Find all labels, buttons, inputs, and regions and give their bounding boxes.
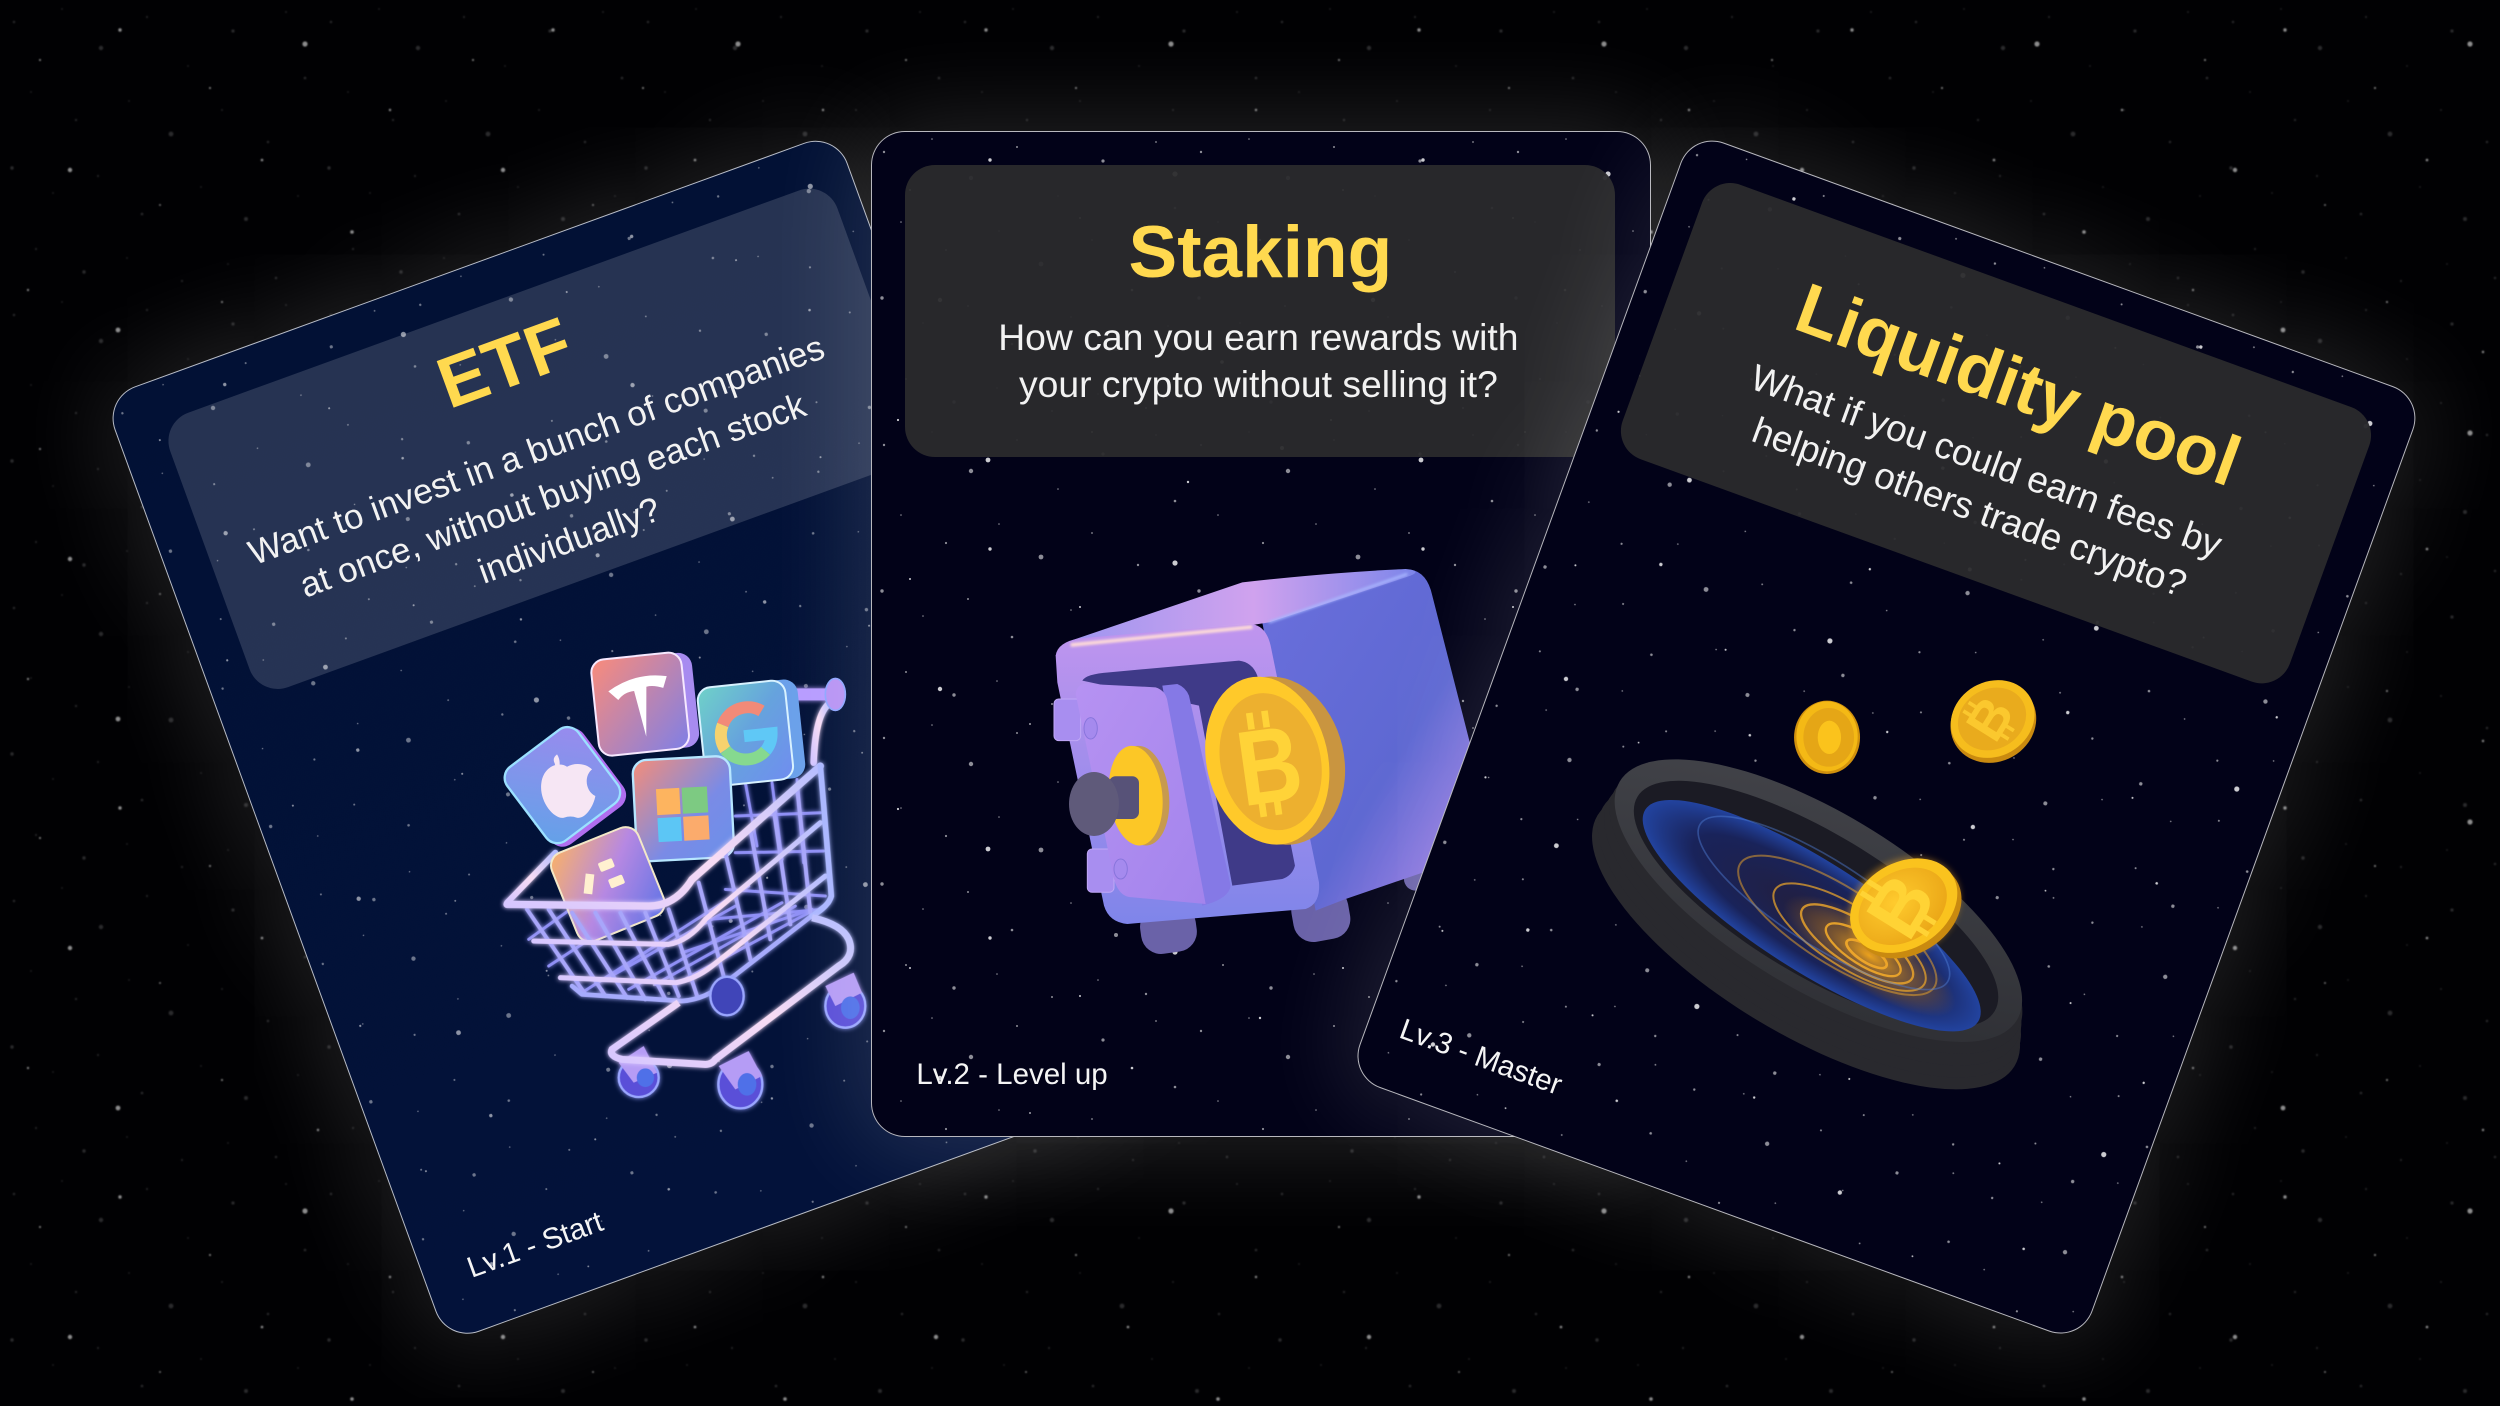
swirl [1672,788,1988,1038]
safe top face [1056,569,1416,656]
illustration: safe with bitcoin [1054,569,1470,954]
card: Liquidity pool [1348,131,2425,1343]
question: Staking: your crypto without selling it? [1019,363,1498,405]
edge highlight between top and side [1269,574,1408,623]
title: ETF: ETF [427,303,583,425]
header panel: Liquidity pool [1613,175,2380,692]
illustration: liquidity pool dish with coins [1592,680,2036,1090]
title: Liquidity pool: Liquidity pool [1786,269,2250,502]
coin: upper right [1936,665,2051,779]
card shadow: Liquidity pool [1348,131,2425,1343]
bitcoin coin: B [1230,702,1310,830]
coin: main falling coin [1831,838,1980,978]
icon: Google tile [697,678,807,788]
dish body [1550,713,2063,1146]
card: Staking [871,131,1651,1137]
card shadow: Staking [871,131,1651,1137]
question: Staking [998,316,1519,405]
coin: middle [1794,701,1860,774]
coin: main falling coin: B [1851,861,1953,953]
pool water [1616,763,2008,1068]
dish inner wall [1601,736,2031,1072]
safe opening [1083,661,1295,886]
card shadow: ETF [103,131,1180,1343]
safe front face [1056,624,1320,924]
safe door [1163,684,1231,906]
question: Liquidity pool: helping others trade crypto? [1747,409,2192,605]
bitcoin coin [1189,664,1362,858]
cart basket front [508,766,832,1001]
question: ETF: at once, without buying each stock [295,386,811,606]
cart chassis [612,918,851,1065]
illustration: shopping cart with company icons [500,652,870,1114]
question: ETF: Want to invest in a bunch of companies [243,328,830,573]
cart handle grip [826,679,846,711]
icon: fifth app tile [547,823,669,946]
safe dial [1111,744,1174,849]
level label: Lv.2: Lv.2 - Level up [916,1058,1108,1091]
safe knob [1069,772,1119,836]
icon: Apple tile [500,720,633,854]
door hinges [1054,699,1114,893]
question: Staking: How can you earn rewards with [998,316,1519,358]
card: ETF [103,131,1180,1343]
question: ETF: individually? [473,490,666,592]
icon: Microsoft tile [633,756,735,862]
door rivets [1084,718,1128,879]
cart back wires and handle [508,695,831,993]
question: Liquidity pool: What if you could earn fees by [1745,357,2227,565]
header panel: ETF [160,180,928,698]
level label: Lv.1: Lv.1 - Start [463,1205,608,1285]
cart wheels [619,973,866,1109]
header panel: Staking [905,165,1615,457]
icon: Tesla tile [591,650,701,757]
highlight [1071,627,1253,645]
level label: Lv.3: Lv.3 - Master [1395,1013,1566,1102]
dish rim [1575,706,2063,1096]
coin: upper right: B [1956,687,2026,751]
title: Staking: Staking [1129,212,1392,293]
safe side face [1263,570,1473,911]
safe feet [1138,859,1441,957]
